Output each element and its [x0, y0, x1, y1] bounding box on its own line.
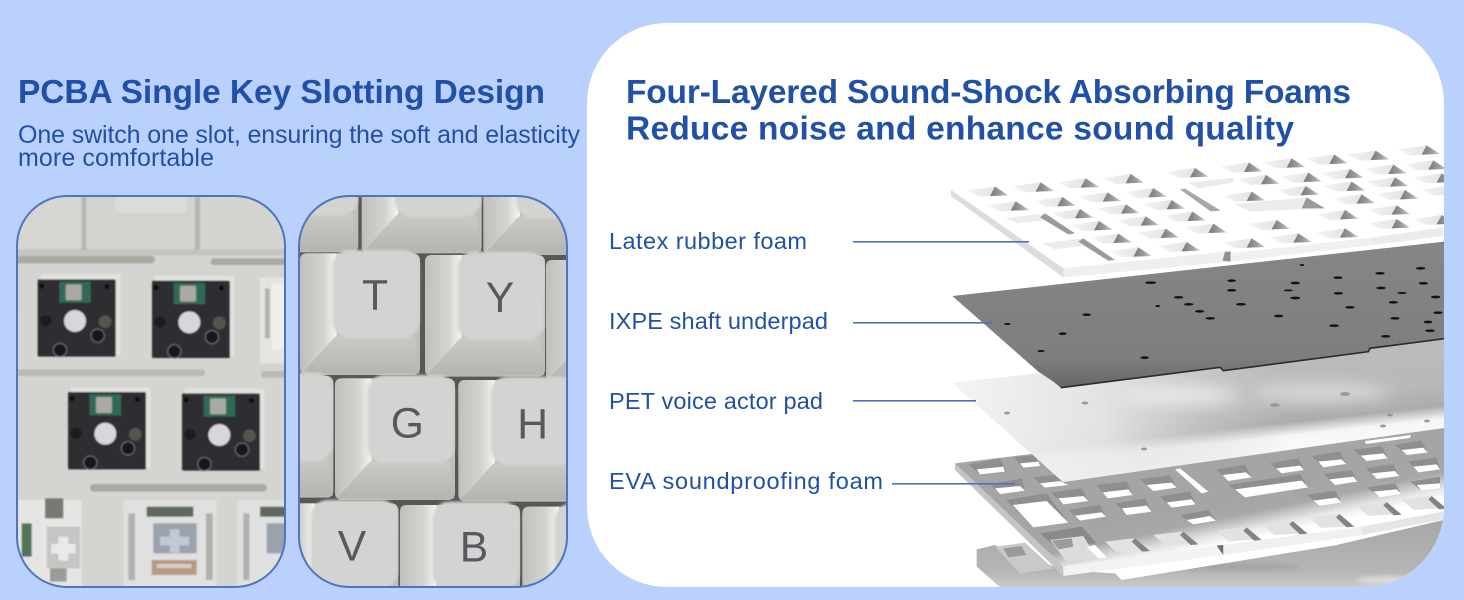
label: latex rubber foam: Latex rubber foam [609, 228, 807, 254]
EVA dark recess frames [968, 441, 1440, 547]
text block: switch slot description [18, 121, 580, 172]
exploded foam layers [951, 138, 1463, 590]
top keycaps [13, 193, 290, 255]
transparent switch top right [260, 278, 284, 364]
key legends: V [338, 523, 367, 571]
heading: four-layered foams [626, 74, 1351, 148]
panel: keycaps photo [298, 195, 568, 588]
mounted switch left [18, 498, 82, 587]
key legends: B [460, 523, 488, 571]
heading: four-layered foams: Reduce noise and enhance sound quality [626, 110, 1294, 148]
mounted switch center [123, 500, 217, 587]
layer: latex rubber foam [951, 138, 1463, 277]
key legends: G [391, 399, 424, 447]
layer: PET voice actor pad [953, 328, 1444, 482]
latex key holes [967, 145, 1463, 261]
label: EVA soundproofing foam: EVA soundproofing foam [609, 468, 883, 494]
text block: switch slot description: more comfortable [18, 144, 214, 172]
heading: PCBA single key slotting: PCBA Single Key Slotting Design [18, 74, 545, 111]
layer: IXPE shaft underpad [952, 241, 1447, 388]
panel: PCB switch slots photo [13, 193, 291, 587]
keycaps [213, 127, 666, 600]
EVA through holes [977, 448, 1440, 527]
switch sockets [38, 275, 265, 471]
key legends: T [362, 271, 388, 319]
heading: four-layered foams: Four-Layered Sound-Shock Absorbing Foams [626, 74, 1351, 111]
EVA front recesses [1050, 496, 1447, 562]
panel: foam layers [587, 23, 1463, 590]
mounted switch right [238, 500, 284, 586]
layer: EVA soundproofing foam [955, 428, 1444, 576]
key legends: H [517, 401, 548, 449]
label: IXPE shaft underpad: IXPE shaft underpad [609, 308, 828, 334]
key legends: Y [486, 274, 514, 322]
plate slots [13, 256, 291, 492]
layer: bottom plate and shadow [977, 520, 1443, 590]
label: PET voice actor pad: PET voice actor pad [609, 388, 823, 414]
key legends [338, 271, 548, 571]
text block: switch slot description: One switch one slot, ensuring the soft and elasticity [18, 121, 580, 149]
